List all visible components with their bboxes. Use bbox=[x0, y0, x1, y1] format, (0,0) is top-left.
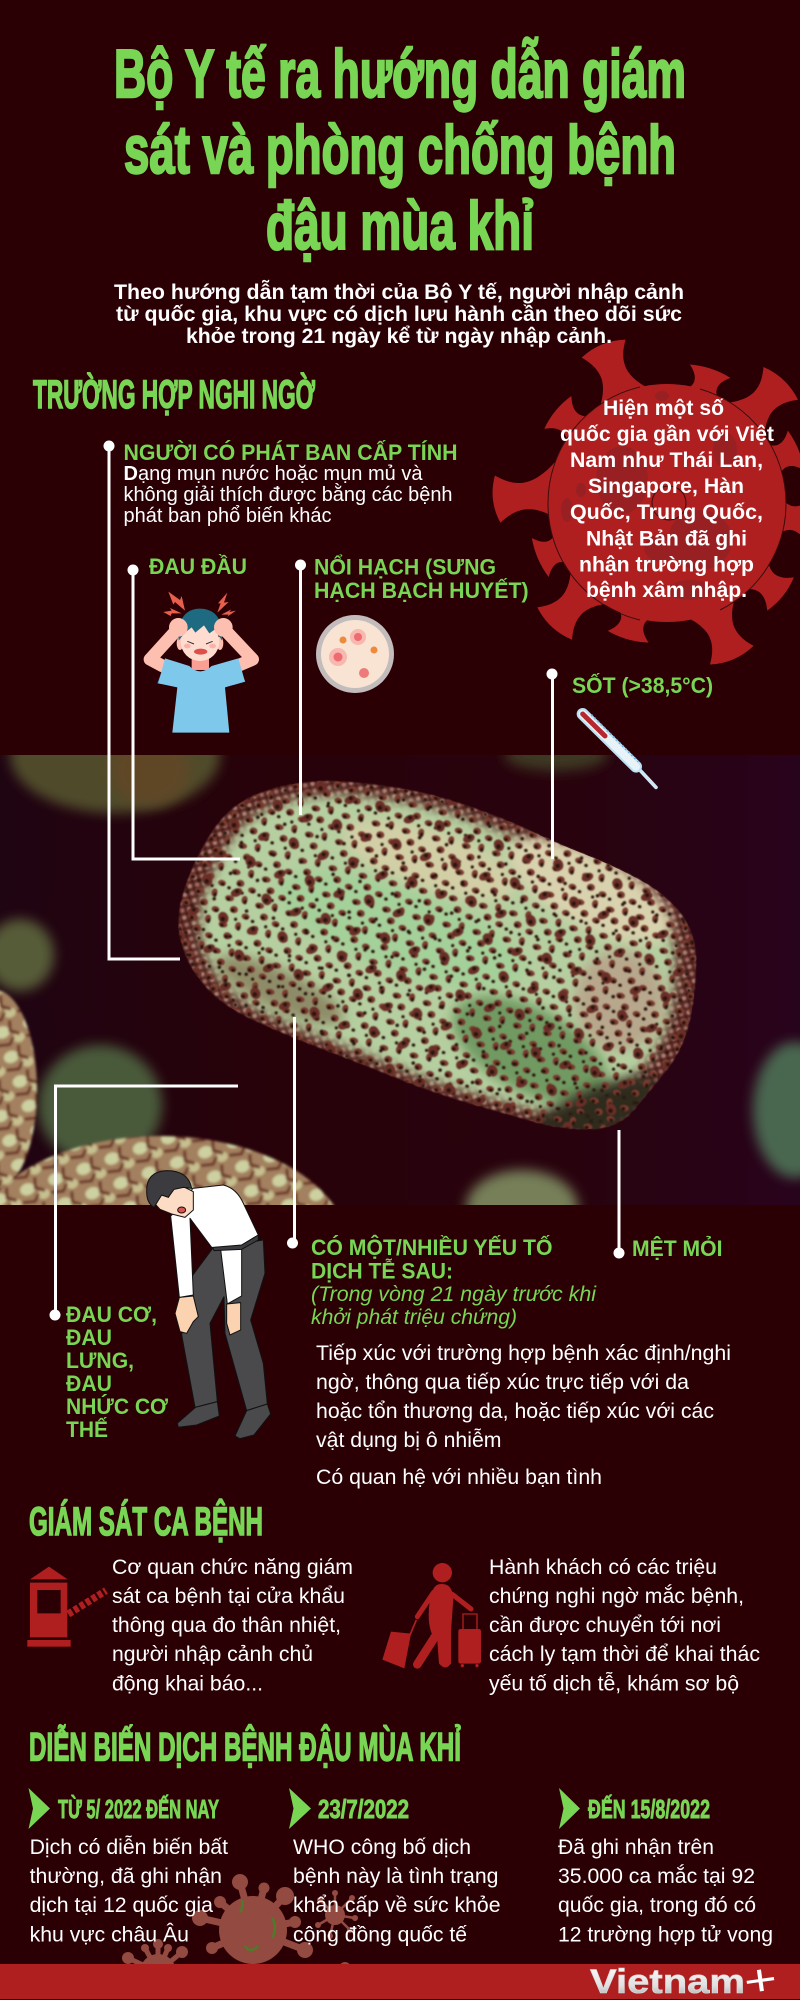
date: until 15/8/2022: ĐẾN 15/8/2022 bbox=[588, 1794, 710, 1824]
icon: person with headache bbox=[150, 592, 253, 733]
intro text: khỏe trong 21 ngày kể từ ngày nhập cảnh. bbox=[186, 325, 612, 348]
epidemiological factors body: Tiếp xúc với trường hợp bệnh xác định/nghi bbox=[316, 1342, 731, 1365]
epidemiological factors body bbox=[316, 1342, 731, 1489]
epidemiological factors heading: (Trong vòng 21 ngày trước khi bbox=[311, 1283, 597, 1306]
text: column 3: 12 trường hợp tử vong bbox=[558, 1924, 773, 1946]
decorative viruses bbox=[122, 1874, 358, 1990]
symptom: acute rash: Dạng mụn nước hoặc mụn mủ và bbox=[124, 463, 423, 485]
symptom: acute rash: phát ban phổ biến khác bbox=[124, 505, 332, 527]
date: since May 2022: TỪ 5/ 2022 ĐẾN NAY bbox=[58, 1794, 219, 1824]
symptom: acute rash bbox=[124, 440, 458, 527]
callout: neighbouring countries: Hiện một số bbox=[603, 397, 724, 420]
symptom: muscle and body aches: THẾ bbox=[66, 1417, 108, 1442]
text: column 3: 35.000 ca mắc tại 92 bbox=[558, 1865, 755, 1888]
intro text bbox=[114, 280, 684, 348]
epidemiological factors heading: DỊCH TỄ SAU: bbox=[311, 1258, 453, 1284]
callout: neighbouring countries: nhận trường hợp bbox=[579, 554, 754, 576]
text: checkpoint monitoring: thông qua đo thân nhiệt, bbox=[112, 1614, 341, 1637]
callout: neighbouring countries: quốc gia gần với Việt bbox=[560, 423, 774, 446]
intro text: từ quốc gia, khu vực có dịch lưu hành cần theo dõi sức bbox=[116, 303, 682, 326]
connector: headache bbox=[128, 564, 240, 859]
symptom: muscle and body aches: ĐAU bbox=[66, 1325, 112, 1350]
epidemiological factors body: ngờ, thông qua tiếp xúc trực tiếp với da bbox=[316, 1371, 689, 1394]
text: column 3: quốc gia, trong đó có bbox=[558, 1894, 756, 1917]
connector: fever bbox=[546, 668, 558, 859]
arrow: column 2 bbox=[289, 1788, 311, 1829]
connector: fatigue bbox=[614, 1130, 624, 1258]
icon: skin rash dish bbox=[316, 615, 394, 693]
symptom: swollen lymph nodes: NỔI HẠCH (SƯNG bbox=[314, 554, 496, 580]
footer bar bbox=[0, 1964, 800, 1999]
text: checkpoint monitoring: Cơ quan chức năng giám bbox=[112, 1556, 353, 1579]
arrow: column 3 bbox=[559, 1788, 580, 1829]
symptom: muscle and body aches: LƯNG, bbox=[66, 1348, 134, 1373]
symptom: muscle and body aches: NHỨC CƠ bbox=[66, 1394, 168, 1419]
callout: neighbouring countries: bệnh xâm nhập. bbox=[586, 579, 747, 602]
symptom: muscle and body aches bbox=[66, 1302, 168, 1442]
text: quarantine of passengers bbox=[489, 1556, 760, 1696]
text: column 1: khu vực châu Âu bbox=[30, 1924, 189, 1946]
symptom: swollen lymph nodes: HẠCH BẠCH HUYẾT) bbox=[314, 578, 529, 603]
symptom: headache: ĐAU ĐẦU bbox=[149, 554, 247, 579]
epidemiological factors body: Có quan hệ với nhiều bạn tình bbox=[316, 1466, 602, 1489]
epidemiological factors heading bbox=[311, 1234, 597, 1329]
text: quarantine of passengers: cách ly tạm thời để khai thác bbox=[489, 1643, 760, 1666]
text: checkpoint monitoring: người nhập cảnh chủ bbox=[112, 1643, 313, 1666]
symptom: acute rash: NGƯỜI CÓ PHÁT BAN CẤP TÍNH bbox=[124, 440, 458, 465]
symptom: acute rash: không giải thích được bằng các bệnh bbox=[124, 483, 452, 506]
heading: case surveillance: GIÁM SÁT CA BỆNH bbox=[29, 1498, 263, 1544]
intro text: Theo hướng dẫn tạm thời của Bộ Y tế, người nhập cảnh bbox=[114, 280, 684, 304]
text: column 2: khẩn cấp về sức khỏe bbox=[293, 1894, 500, 1917]
text: checkpoint monitoring bbox=[112, 1556, 353, 1696]
text: column 2: WHO công bố dịch bbox=[293, 1836, 471, 1859]
heading: suspected cases: TRƯỜNG HỢP NGHI NGỜ bbox=[33, 371, 315, 417]
text: column 3: Đã ghi nhận trên bbox=[558, 1836, 714, 1859]
text: column 3 bbox=[558, 1836, 773, 1946]
text: quarantine of passengers: Hành khách có các triệu bbox=[489, 1556, 717, 1579]
arrow: column 1 bbox=[28, 1788, 50, 1829]
epidemiological factors heading: CÓ MỘT/NHIỀU YẾU TỐ bbox=[311, 1234, 552, 1260]
text: quarantine of passengers: cần được chuyển tới nơi bbox=[489, 1614, 721, 1637]
epidemiological factors body: hoặc tổn thương da, hoặc tiếp xúc với các bbox=[316, 1400, 714, 1423]
connector: swollen lymph nodes bbox=[295, 560, 306, 815]
text: column 1: thường, đã ghi nhận bbox=[30, 1865, 222, 1888]
epidemiological factors body: vật dụng bị ô nhiễm bbox=[316, 1429, 502, 1452]
symptom: muscle and body aches: ĐAU bbox=[66, 1371, 112, 1396]
symptom: fever: SỐT (>38,5°C) bbox=[572, 672, 713, 698]
connector: muscle pain bbox=[50, 1086, 238, 1320]
virus illustration: callout background bbox=[487, 326, 800, 678]
symptom: fatigue: MỆT MỎI bbox=[632, 1236, 722, 1261]
photo: monkeypox virus bbox=[0, 755, 800, 1205]
epidemiological factors heading: khởi phát triệu chứng) bbox=[311, 1306, 517, 1329]
date: 23/7/2022: 23/7/2022 bbox=[318, 1794, 409, 1824]
icon: tired man bbox=[147, 1171, 271, 1439]
callout: neighbouring countries: Nhật Bản đã ghi bbox=[586, 528, 747, 550]
text: column 1: Dịch có diễn biến bất bbox=[30, 1836, 228, 1859]
icon: thermometer bbox=[583, 714, 656, 787]
callout: neighbouring countries: Singapore, Hàn bbox=[588, 475, 744, 498]
symptom: swollen lymph nodes bbox=[314, 554, 529, 603]
text: column 2 bbox=[293, 1836, 500, 1946]
callout: neighbouring countries: Nam như Thái Lan, bbox=[570, 449, 763, 472]
text: checkpoint monitoring: sát ca bệnh tại cửa khẩu bbox=[112, 1585, 345, 1608]
logo: Vietnam+ bbox=[590, 1954, 780, 2000]
heading: outbreak timeline: DIỄN BIẾN DỊCH BỆNH ĐẬU MÙA KHỈ bbox=[29, 1724, 461, 1770]
icon: border checkpoint bbox=[27, 1567, 106, 1647]
text: column 2: cộng đồng quốc tế bbox=[293, 1924, 467, 1946]
text: quarantine of passengers: chứng nghi ngờ mắc bệnh, bbox=[489, 1585, 744, 1608]
text: quarantine of passengers: yếu tố dịch tễ, khám sơ bộ bbox=[489, 1672, 739, 1696]
callout: neighbouring countries: Quốc, Trung Quốc, bbox=[570, 501, 763, 524]
icon: traveller with luggage bbox=[382, 1563, 481, 1668]
connector: rash bbox=[104, 440, 180, 959]
text: checkpoint monitoring: động khai báo... bbox=[112, 1672, 263, 1696]
text: column 1 bbox=[30, 1836, 228, 1946]
title bbox=[114, 36, 686, 264]
text: column 1: dịch tại 12 quốc gia bbox=[30, 1894, 213, 1917]
symptom: muscle and body aches: ĐAU CƠ, bbox=[66, 1302, 157, 1327]
callout: neighbouring countries bbox=[560, 397, 774, 602]
text: column 2: bệnh này là tình trạng bbox=[293, 1865, 498, 1888]
connector: epidemiological factors bbox=[287, 1017, 298, 1248]
logo: Vietnam+: Vietnam bbox=[590, 1963, 745, 2000]
title: đậu mùa khỉ bbox=[266, 188, 534, 264]
